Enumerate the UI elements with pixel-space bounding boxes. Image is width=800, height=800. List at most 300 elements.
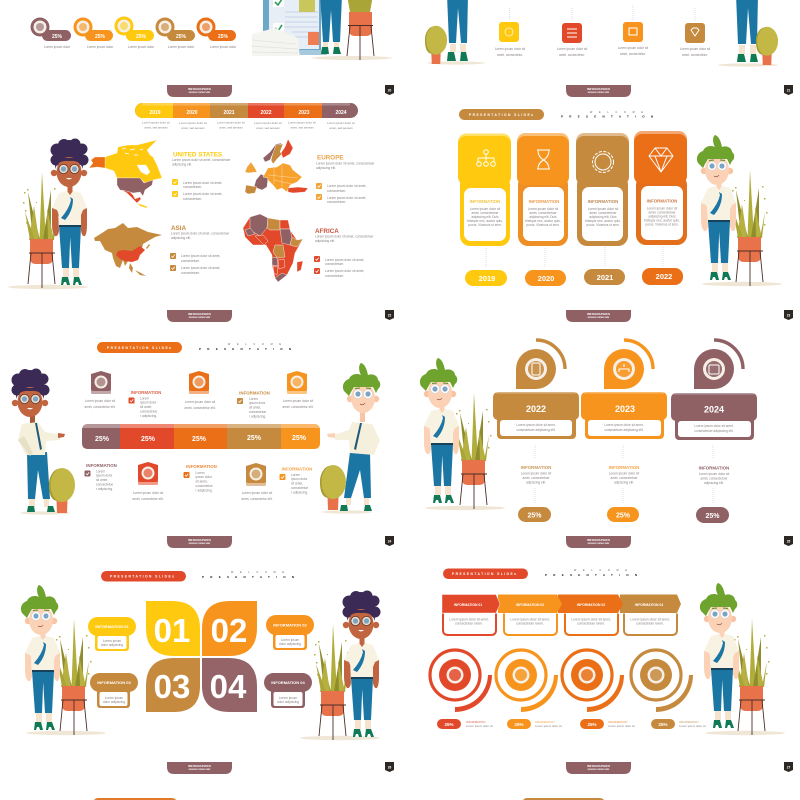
arrow 01 bbox=[442, 594, 500, 613]
united states text block: adipiscing elit. bbox=[172, 162, 192, 166]
percent label 3 bbox=[580, 719, 635, 729]
heading pill bbox=[443, 568, 528, 579]
percent label 4: Lorem ipsum dolor sit bbox=[679, 724, 706, 728]
left presenter with cactus bbox=[12, 368, 75, 515]
information block top left: sit amet, bbox=[140, 405, 152, 409]
character with plant bbox=[8, 138, 88, 289]
card 2021: tristique nec, auctor quis, bbox=[585, 219, 621, 223]
year pill 2021: 2021 bbox=[597, 273, 613, 282]
europe text block: Lorem ipsum dolor sit amet, bbox=[327, 184, 366, 188]
year timeline bar: 2020 bbox=[186, 110, 198, 116]
card 2022: INFORMATION bbox=[647, 198, 677, 204]
arrow 02 bbox=[498, 594, 562, 613]
top icon 2 bbox=[184, 371, 216, 410]
slide 25 page number: 25 bbox=[787, 540, 790, 544]
united states text block: Lorem ipsum dolor sit amet, bbox=[183, 181, 222, 185]
frame 2: consectetuer lorem. bbox=[516, 622, 544, 626]
information block bottom left: consectetue bbox=[96, 482, 113, 486]
welcome heading bbox=[202, 571, 294, 579]
token 5: 25% bbox=[218, 34, 229, 40]
frame 2 bbox=[504, 614, 557, 635]
information block bottom left: sit amet, bbox=[96, 478, 108, 482]
year timeline bar: amet, sed aenean bbox=[256, 126, 280, 130]
pin 2022: amet, consectetuer bbox=[522, 476, 550, 480]
card 2019 bbox=[458, 134, 511, 246]
bottom icon 2: amet, consectetur elit. bbox=[241, 497, 273, 501]
frame 1: consectetuer lorem. bbox=[455, 622, 483, 626]
slide 26 footer tab bbox=[167, 762, 232, 774]
token row bbox=[30, 16, 237, 49]
spiral 3 bbox=[562, 650, 624, 712]
united states text block: UNITED STATES bbox=[173, 152, 222, 158]
step 3: orange folder square: Lorem ipsum dolor sit bbox=[618, 46, 648, 50]
step 2: red sliders square: amet, consectetur. bbox=[559, 53, 585, 57]
frame 3: consectetuer lorem. bbox=[577, 622, 605, 626]
information block top left: r adipiscing. bbox=[140, 414, 157, 418]
information block top left: INFORMATION bbox=[131, 390, 161, 395]
slide 27 footer tab bbox=[566, 762, 631, 774]
pin 2022: adipiscing elit. bbox=[526, 480, 546, 484]
slide 20 page number bbox=[385, 85, 394, 95]
information block bottom right: consectetue bbox=[291, 486, 308, 490]
card 2022: adipiscing elit. Duis bbox=[648, 214, 676, 218]
card 2020: amet, consectetuer bbox=[529, 211, 557, 215]
information block bottom middle: r adipiscing. bbox=[196, 488, 213, 492]
token 2: 25% bbox=[95, 34, 106, 40]
slide 22 page number: 22 bbox=[388, 314, 391, 318]
step 3: orange folder square: amet, consectetur. bbox=[620, 52, 646, 56]
information block top right: Lorem bbox=[249, 397, 258, 401]
map: africa bbox=[243, 214, 303, 282]
top icon 1 bbox=[84, 371, 116, 409]
heading pill bbox=[97, 342, 182, 353]
frame 4 bbox=[624, 614, 677, 635]
information block top right: consectetue bbox=[249, 410, 266, 414]
welcome heading: WELCOME bbox=[228, 343, 281, 346]
pin 2024: 2024 bbox=[704, 404, 724, 414]
card 2022: amet, consectetuer bbox=[648, 210, 676, 214]
information block top right bbox=[237, 390, 270, 418]
token 1: Lorem ipsum dolor bbox=[44, 45, 71, 49]
connector lines bbox=[486, 247, 663, 267]
slide 27 page number bbox=[784, 762, 793, 772]
percentage bar: 25% bbox=[95, 436, 110, 443]
step 4: tan diamond square: amet, consectetur. bbox=[682, 53, 708, 57]
year timeline bar: Lorem ipsum dolor sit bbox=[327, 121, 355, 125]
spiral 2 bbox=[496, 650, 558, 712]
right character with plant bbox=[300, 590, 380, 740]
asia text block: ASIA bbox=[171, 225, 186, 232]
arrow ribbon bbox=[442, 594, 681, 613]
heading pill: PRESENTATION SLIDEs bbox=[110, 574, 174, 578]
slide 22 page number bbox=[385, 310, 394, 320]
slide 21 footer tab bbox=[566, 85, 631, 97]
pin 2024 bbox=[671, 340, 757, 523]
information block bottom left bbox=[84, 463, 117, 491]
information block top right: r adipiscing. bbox=[249, 414, 266, 418]
token 3 bbox=[114, 16, 155, 49]
percentage bar: 25% bbox=[192, 436, 207, 443]
card 2019: adipiscing elit. Duis bbox=[471, 215, 499, 219]
pin 2022: 2022 bbox=[526, 404, 546, 414]
clipboard illustration with paper stack bbox=[251, 0, 327, 56]
pin 2024: Lorem ipsum dolor sit amet, bbox=[694, 424, 734, 428]
information block bottom right: Lorem bbox=[291, 473, 300, 477]
card 2020: INFORMATION bbox=[529, 199, 559, 204]
europe text block: Lorem ipsum dolor sit amet, consectetuer bbox=[316, 162, 375, 166]
year pill 2020 bbox=[525, 270, 566, 286]
information block top left: consectetue bbox=[140, 410, 157, 414]
pin 2022: INFORMATION bbox=[521, 465, 551, 470]
heading pill bbox=[101, 571, 186, 582]
card 2021: purus. Vivamus ut sem. bbox=[586, 223, 620, 227]
africa text block: consectetuer. bbox=[325, 274, 344, 278]
character with plant bbox=[697, 135, 782, 286]
welcome heading: WELCOME bbox=[231, 571, 284, 574]
pin 2024: Lorem ipsum dolor sit bbox=[699, 472, 729, 476]
token 5 bbox=[196, 18, 237, 49]
slide 23 footer tab bbox=[566, 310, 631, 322]
card 2022 bbox=[634, 131, 687, 245]
information 04: INFORMATION 04 bbox=[271, 680, 306, 685]
heading pill: PRESENTATION SLIDEs bbox=[469, 113, 533, 117]
step 4: tan diamond square bbox=[680, 8, 710, 57]
left character legs with cactus bbox=[425, 0, 485, 65]
information block bottom middle: consectetue bbox=[196, 484, 213, 488]
petal 01 bbox=[146, 601, 200, 656]
welcome heading bbox=[199, 343, 291, 351]
map: north america bbox=[89, 140, 162, 208]
top icon 3: amet, consectetur elit. bbox=[282, 405, 314, 409]
information block bottom middle bbox=[184, 464, 217, 492]
percent label 2: INFORMATION bbox=[535, 720, 554, 724]
token 4: 25% bbox=[176, 34, 187, 40]
arrow 03: INFORMATION 03 bbox=[577, 603, 605, 607]
step 1: yellow gear square: Lorem ipsum dolor sit bbox=[495, 47, 525, 51]
year pill 2019 bbox=[465, 270, 507, 286]
frame 4: Lorem ipsum dolor sit amet, bbox=[630, 618, 670, 622]
information block bottom left: r adipiscing. bbox=[96, 487, 113, 491]
top icon 1: Lorem ipsum dolor sit bbox=[85, 399, 115, 403]
information 02: Lorem ipsum bbox=[281, 638, 300, 642]
token 2 bbox=[74, 18, 114, 49]
united states text block: Lorem ipsum dolor sit amet, bbox=[183, 192, 222, 196]
pin 2023: INFORMATION bbox=[609, 465, 639, 470]
step 1: yellow gear square bbox=[495, 8, 525, 57]
welcome heading bbox=[545, 569, 637, 577]
information block bottom middle: Lorem bbox=[196, 471, 205, 475]
africa text block: AFRICA bbox=[315, 228, 339, 235]
card 2020: tristique nec, auctor quis, bbox=[525, 219, 561, 223]
character with plant bbox=[700, 583, 785, 735]
token 5: Lorem ipsum dolor bbox=[210, 45, 237, 49]
card 2020 bbox=[517, 133, 569, 246]
information block bottom middle: sit amet, bbox=[196, 480, 208, 484]
slide 23: four year cards bbox=[458, 109, 782, 286]
percent label 4: INFORMATION bbox=[679, 720, 698, 724]
petal 02: 02 bbox=[211, 612, 247, 649]
slide 23 page number bbox=[784, 310, 793, 320]
card 2021: amet, consectetuer bbox=[589, 211, 617, 215]
slide 26 page number bbox=[385, 762, 394, 772]
card 2020: purus. Vivamus ut sem. bbox=[526, 223, 560, 227]
character legs and potted plant bbox=[312, 0, 392, 60]
bottom icon 2 bbox=[241, 463, 273, 501]
pin 2024: INFORMATION bbox=[699, 466, 729, 470]
step 4: tan diamond square: Lorem ipsum dolor sit bbox=[680, 47, 710, 51]
pin 2024: adipiscing elit. bbox=[704, 481, 724, 485]
percent label 3: INFORMATION bbox=[608, 720, 627, 724]
europe text block: EUROPE bbox=[317, 154, 344, 162]
year pill 2021 bbox=[584, 269, 625, 285]
information block top left: Lorem bbox=[140, 396, 149, 400]
percent label 1 bbox=[437, 719, 493, 729]
year timeline bar: 2024 bbox=[335, 110, 347, 116]
map: europe bbox=[245, 139, 308, 194]
pin 2022: 25% bbox=[527, 512, 542, 520]
africa text block bbox=[314, 228, 374, 278]
card 2020: Lorem ipsum dolor sit bbox=[528, 207, 558, 211]
slide 20: percentage tokens and documents bbox=[30, 0, 392, 60]
slide 24 page number bbox=[385, 536, 394, 546]
information 02: dolor adipiscing bbox=[279, 642, 301, 646]
information block bottom left: ipsum dolor bbox=[96, 474, 113, 478]
heading pill: PRESENTATION SLIDEs bbox=[452, 572, 516, 576]
slide 27: arrows and spirals bbox=[430, 568, 785, 735]
arrow 04: INFORMATION 04 bbox=[635, 603, 663, 607]
year timeline bar: Lorem ipsum dolor sit bbox=[179, 121, 207, 125]
year timeline bar: amet, sed aenean bbox=[144, 126, 168, 130]
information block bottom right: ipsum dolor bbox=[291, 477, 308, 481]
pin 2023: 25% bbox=[616, 512, 631, 520]
percent label 2: Lorem ipsum dolor sit bbox=[535, 724, 562, 728]
pin 2022: Lorem ipsum dolor sit bbox=[521, 472, 551, 476]
cropped next-row pill left bbox=[93, 798, 177, 800]
africa text block: Lorem ipsum dolor sit amet, bbox=[325, 269, 364, 273]
step 1: yellow gear square: amet, consectetur. bbox=[497, 53, 523, 57]
year timeline bar: Lorem ipsum dolor sit bbox=[217, 120, 245, 124]
slide 23 page number: 23 bbox=[787, 314, 790, 318]
information block top left: ipsum dolor bbox=[140, 400, 157, 404]
year pill 2019: 2019 bbox=[479, 274, 495, 283]
percentage bar bbox=[82, 424, 320, 449]
slide 21 page number: 21 bbox=[787, 88, 790, 92]
frame 2: Lorem ipsum dolor sit amet, bbox=[510, 618, 550, 622]
card 2022: tristique nec, auctor quis, bbox=[644, 218, 680, 222]
pin 2022: Lorem ipsum dolor sit amet, bbox=[516, 423, 556, 427]
step 2: red sliders square: Lorem ipsum dolor sit bbox=[557, 47, 587, 51]
united states text block: consectetuer. bbox=[183, 197, 202, 201]
spiral 1 bbox=[430, 650, 492, 712]
slide 21: icon squares between two characters bbox=[425, 0, 778, 67]
information block bottom right: sit amet, bbox=[291, 482, 303, 486]
africa text block: consectetuer. bbox=[325, 262, 344, 266]
card 2021: Lorem ipsum dolor sit bbox=[588, 207, 618, 211]
information block top left bbox=[128, 390, 161, 418]
slide 25 page number bbox=[784, 536, 793, 546]
welcome heading bbox=[561, 111, 653, 118]
right character legs with cactus bbox=[718, 0, 778, 67]
top icon 3: Lorem ipsum dolor sit bbox=[283, 399, 313, 403]
asia text block: adipiscing elit. bbox=[171, 236, 191, 240]
bottom icon 1: amet, consectetur elit. bbox=[132, 497, 164, 501]
information 01: INFORMATION 01 bbox=[95, 624, 130, 629]
africa text block: Lorem ipsum dolor sit amet, consectetuer bbox=[315, 234, 374, 238]
top icon 3 bbox=[282, 371, 314, 409]
frame 1: Lorem ipsum dolor sit amet, bbox=[449, 618, 489, 622]
percent label 4: 25% bbox=[658, 722, 668, 727]
information block bottom left: INFORMATION bbox=[86, 463, 117, 468]
percent label 3: 25% bbox=[587, 722, 597, 727]
europe text block: Lorem ipsum dolor sit amet, bbox=[327, 196, 366, 200]
percentage bar: 25% bbox=[292, 435, 307, 442]
arrow 01: INFORMATION 01 bbox=[454, 603, 482, 607]
pin 2023: Lorem ipsum dolor sit bbox=[609, 472, 639, 476]
information block bottom left: Lorem bbox=[96, 470, 105, 474]
card 2019: tristique nec, auctor quis, bbox=[467, 219, 503, 223]
welcome heading: WELCOME bbox=[590, 111, 643, 114]
information block bottom right: r adipiscing. bbox=[291, 490, 308, 494]
information 03: dolor adipiscing bbox=[103, 700, 125, 704]
percent label 3: Lorem ipsum dolor sit bbox=[608, 724, 635, 728]
card 2019: purus. Vivamus ut sem. bbox=[468, 223, 502, 227]
year timeline bar: 2019 bbox=[149, 110, 161, 116]
pin 2023: 2023 bbox=[615, 404, 635, 414]
year pill 2022: 2022 bbox=[656, 272, 672, 281]
europe text block: consectetuer. bbox=[327, 189, 346, 193]
slide 24 footer tab bbox=[167, 536, 232, 548]
information block top right: sit amet, bbox=[249, 406, 261, 410]
information 03: INFORMATION 03 bbox=[97, 680, 132, 685]
africa text block: adipiscing elit. bbox=[315, 239, 335, 243]
asia text block: Lorem ipsum dolor sit amet, consectetuer bbox=[171, 232, 230, 236]
pin 2024: amet, consectetuer bbox=[700, 476, 728, 480]
welcome heading: PRESENTATION bbox=[545, 573, 637, 577]
arrow 04 bbox=[620, 594, 681, 613]
pin 2023: amet, consectetuer bbox=[610, 476, 638, 480]
percent label 2 bbox=[507, 719, 562, 729]
slide 24: percentage bar between two presenters bbox=[12, 342, 380, 515]
welcome heading: PRESENTATION bbox=[199, 347, 291, 351]
welcome heading: PRESENTATION bbox=[202, 575, 294, 579]
information block bottom right: INFORMATION bbox=[282, 466, 312, 472]
arrow 02: INFORMATION 02 bbox=[516, 603, 544, 607]
slide 27 page number: 27 bbox=[787, 766, 790, 770]
year pill 2022 bbox=[642, 268, 683, 285]
year timeline bar: Lorem ipsum dolor sit bbox=[288, 120, 316, 124]
token 3: Lorem ipsum dolor bbox=[128, 45, 155, 49]
year timeline bar: amet, sed aenean bbox=[181, 126, 205, 130]
right presenter with cactus bbox=[320, 363, 380, 514]
information 03 bbox=[90, 673, 138, 708]
united states text block: Lorem ipsum dolor sit amet, consectetuer bbox=[172, 158, 231, 162]
pin 2023: Lorem ipsum dolor sit amet, bbox=[604, 423, 644, 427]
petal 02 bbox=[202, 601, 257, 656]
slide 20 page number: 20 bbox=[388, 88, 391, 92]
percentage bar: 25% bbox=[247, 435, 262, 442]
percentage bar: 25% bbox=[141, 436, 156, 443]
africa text block: Lorem ipsum dolor sit amet, bbox=[325, 258, 364, 262]
petal 03 bbox=[146, 658, 200, 712]
card 2021 bbox=[576, 133, 629, 246]
information 02 bbox=[266, 615, 314, 650]
slide 21 page number bbox=[784, 85, 793, 95]
heading pill bbox=[459, 109, 544, 120]
token 1 bbox=[30, 18, 71, 49]
token 1: 25% bbox=[52, 34, 63, 40]
left character with plant bbox=[21, 585, 106, 735]
frame 3 bbox=[565, 614, 618, 635]
pin 2022: consectetuer adipiscing elit. bbox=[516, 428, 556, 432]
card 2019: INFORMATION bbox=[470, 199, 500, 204]
pin 2024: consectetuer adipiscing elit. bbox=[694, 429, 734, 433]
slide 26: four petal numbers bbox=[21, 571, 380, 740]
petal 03: 03 bbox=[154, 668, 190, 705]
slide 22 footer tab bbox=[167, 310, 232, 322]
percent label 1: Lorem ipsum dolor sit bbox=[466, 724, 493, 728]
year timeline bar: 2022 bbox=[260, 110, 272, 116]
slide 20 footer tab bbox=[167, 85, 232, 97]
bottom icon 2: Lorem ipsum dolor sit bbox=[242, 491, 272, 495]
asia text block bbox=[170, 225, 230, 275]
asia text block: Lorem ipsum dolor sit amet, bbox=[181, 254, 220, 258]
information 04 bbox=[264, 673, 312, 708]
petal 01: 01 bbox=[154, 612, 190, 649]
europe text block bbox=[316, 154, 375, 204]
token 3: 25% bbox=[136, 34, 147, 40]
pin 2022 bbox=[493, 340, 579, 522]
asia text block: consectetuer. bbox=[181, 259, 200, 263]
card 2019: Lorem ipsum dolor sit bbox=[470, 207, 500, 211]
year timeline bar: 2021 bbox=[223, 110, 235, 116]
petal 04 bbox=[202, 658, 257, 712]
year timeline bar bbox=[135, 103, 358, 130]
information block top right: INFORMATION bbox=[239, 390, 270, 396]
bottom icon 1: Lorem ipsum dolor sit bbox=[133, 491, 163, 495]
token 4: Lorem ipsum dolor bbox=[168, 45, 195, 49]
frame 3: Lorem ipsum dolor sit amet, bbox=[571, 618, 611, 622]
card 2021: INFORMATION bbox=[588, 199, 618, 204]
card 2022: Lorem ipsum dolor sit bbox=[647, 206, 677, 210]
europe text block: adipiscing elit. bbox=[316, 166, 336, 170]
map: asia bbox=[94, 223, 162, 276]
arrow 03 bbox=[558, 594, 623, 613]
year timeline bar: amet, sed aenean bbox=[219, 126, 243, 130]
cropped next-row pill right bbox=[522, 798, 605, 800]
top icon 2: Lorem ipsum dolor sit bbox=[185, 400, 215, 404]
step 2: red sliders square bbox=[557, 8, 587, 57]
frame 1 bbox=[443, 614, 496, 635]
slide 25 footer tab bbox=[566, 536, 631, 548]
welcome heading: PRESENTATION bbox=[561, 114, 653, 118]
information 01 bbox=[88, 617, 136, 651]
year pill 2020: 2020 bbox=[538, 274, 554, 283]
top icon 2: amet, consectetur elit. bbox=[184, 406, 216, 410]
information 01: dolor adipiscing bbox=[101, 643, 123, 647]
step 3: orange folder square bbox=[618, 5, 648, 56]
asia text block: Lorem ipsum dolor sit amet, bbox=[181, 266, 220, 270]
card 2022: purus. Vivamus ut sem. bbox=[645, 222, 679, 226]
information 02: INFORMATION 02 bbox=[273, 622, 308, 628]
asia text block: consectetuer. bbox=[181, 271, 200, 275]
pin 2023: consectetuer adipiscing elit. bbox=[604, 428, 644, 432]
percent label 1: 25% bbox=[444, 722, 454, 727]
petal 04: 04 bbox=[210, 668, 247, 705]
percent label 2: 25% bbox=[514, 722, 524, 727]
information 01: Lorem ipsum bbox=[103, 639, 122, 643]
information block bottom middle: ipsum dolor bbox=[196, 475, 213, 479]
year timeline bar: 2023 bbox=[298, 110, 310, 116]
